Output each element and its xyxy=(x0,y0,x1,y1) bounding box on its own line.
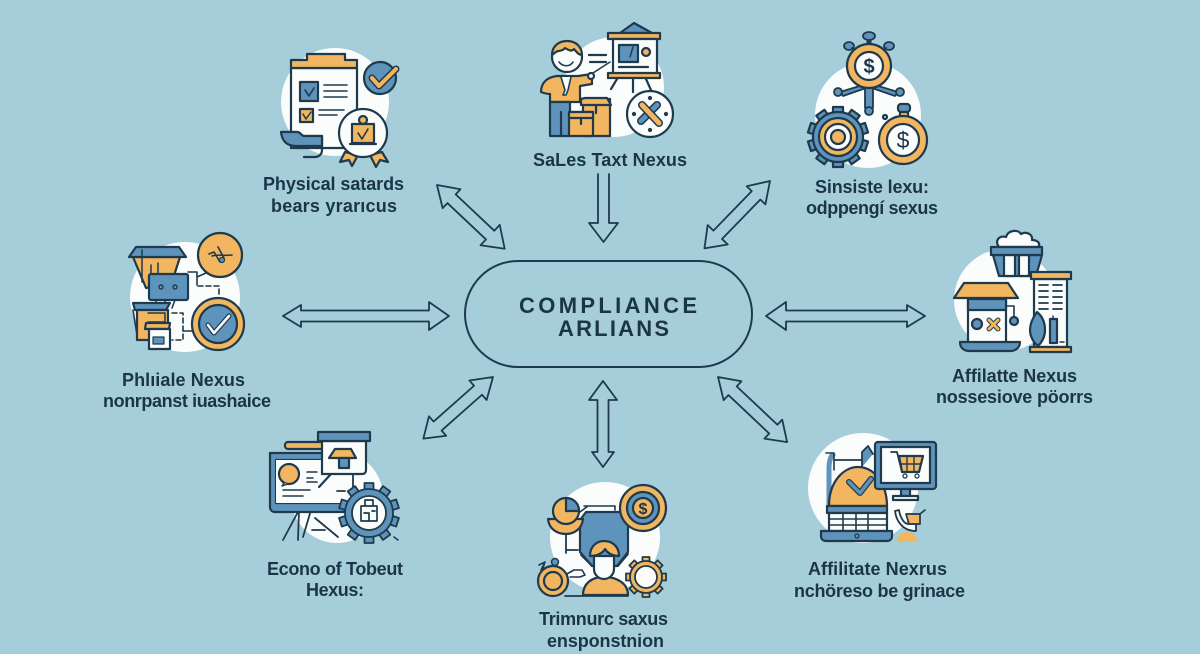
icon: presentation screen with gear xyxy=(270,432,399,543)
label: affilatte nexus: Affilatte Nexus xyxy=(952,366,1077,386)
icon: person with shield, coin and gear xyxy=(538,482,666,597)
label: phliiale nexus: Phlıiale Nexus xyxy=(122,370,245,390)
label: sinsiste lexus xyxy=(806,177,938,218)
label: physical satards: bears yrarıcus xyxy=(271,196,397,216)
label: econo of tobeut: Hexus: xyxy=(306,580,364,600)
panel: bottom trimnurc saxus xyxy=(538,482,668,651)
label: affilatte nexus: nossesiove pöorrs xyxy=(936,387,1093,407)
label: sinsiste lexus: Sinsiste lexu: xyxy=(815,177,929,197)
arrow: right double arrow xyxy=(766,302,925,330)
label: affilitate nexrus xyxy=(794,559,965,601)
panel: bottom-right affiliate nexus xyxy=(794,433,965,601)
panel: top-right gears and coins xyxy=(806,32,938,218)
arrow: bottom-left double arrow xyxy=(415,367,502,448)
icon: wheel, gear and stopwatch: $ xyxy=(897,127,910,153)
icon: clipboard with seal xyxy=(281,48,396,167)
label: phliiale nexus xyxy=(103,370,271,411)
hub title: ARLIANS xyxy=(558,316,669,341)
label: trimnurc saxus: ensponstnion xyxy=(547,631,664,651)
label: trimnurc saxus xyxy=(539,609,668,651)
hub title xyxy=(519,293,697,341)
panel: right affiliate nexus xyxy=(936,231,1093,407)
icon: packages and check badge xyxy=(129,233,244,352)
arrow: top single arrow xyxy=(589,174,618,242)
label: affilitate nexrus: Affilitate Nexrus xyxy=(808,559,947,579)
icon: wheel, gear and stopwatch xyxy=(808,32,927,168)
icon: presenter with board and boxes xyxy=(541,23,673,137)
icon: shop, basket and document xyxy=(954,231,1071,352)
arrow: bottom-right double arrow xyxy=(709,368,796,452)
panel: left physical nexus xyxy=(103,233,271,411)
label: affilatte nexus xyxy=(936,366,1093,407)
label: sales taxt nexus: SaLes Taxt Nexus xyxy=(533,150,687,170)
label: trimnurc saxus: Trimnurc saxus xyxy=(539,609,668,629)
arrow: left double arrow xyxy=(283,302,449,330)
arrow: top-left double arrow xyxy=(427,175,514,259)
label: affilitate nexrus: nchöreso be grinace xyxy=(794,581,965,601)
panel: physical nexus top-left xyxy=(263,48,404,216)
label: physical satards xyxy=(263,174,404,216)
icon: wheel, gear and stopwatch: $ xyxy=(863,56,875,78)
label: econo of tobeut xyxy=(267,559,403,600)
panel: sales tax nexus top xyxy=(533,23,687,170)
icon: register, monitor and cart xyxy=(808,433,936,543)
arrow: top-right double arrow xyxy=(694,171,780,258)
icon: person with shield, coin and gear: $ xyxy=(639,501,648,518)
hub title: COMPLIANCE xyxy=(519,293,697,318)
label: physical satards: Physical satards xyxy=(263,174,404,194)
panel: bottom-left econo nexus xyxy=(267,432,403,600)
label: econo of tobeut: Econo of Tobeut xyxy=(267,559,403,579)
label: phliiale nexus: nonrpanst iuashaice xyxy=(103,391,271,411)
label: sinsiste lexus: odppengí sexus xyxy=(806,198,938,218)
panel: central hub xyxy=(465,261,752,367)
arrow: bottom double arrow xyxy=(589,381,617,467)
